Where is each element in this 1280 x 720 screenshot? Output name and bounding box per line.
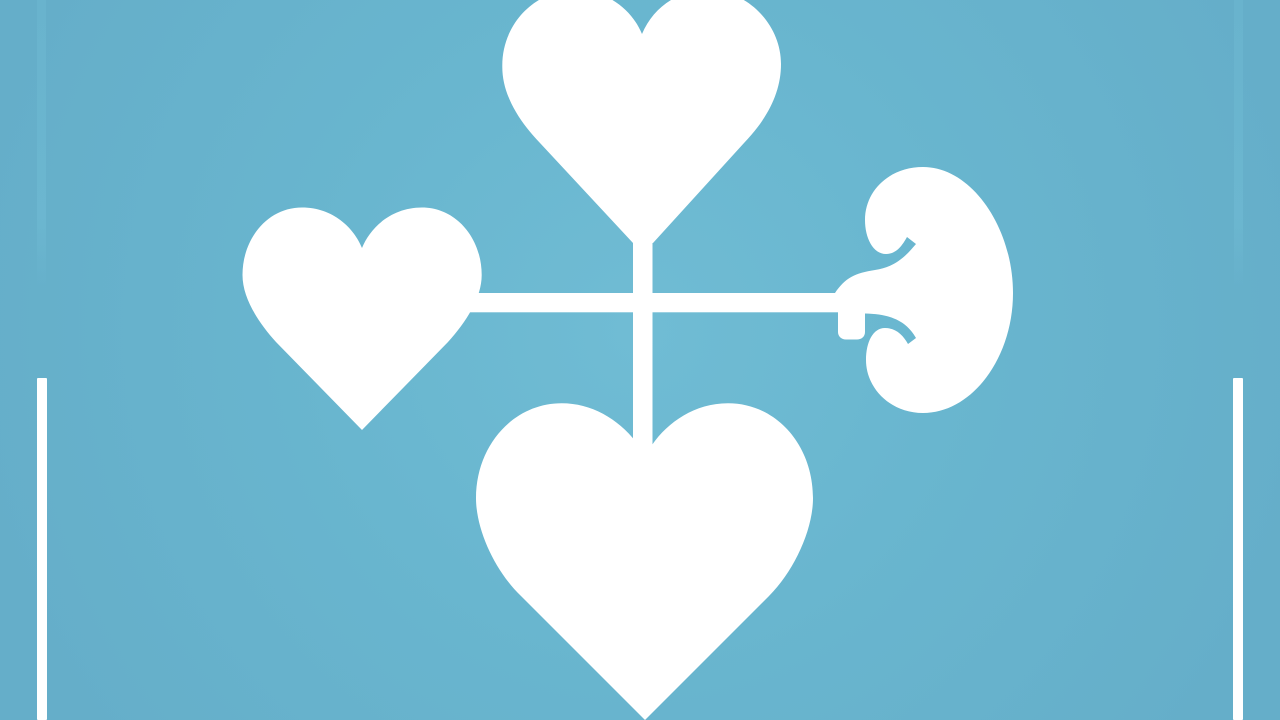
right rail	[1233, 378, 1243, 720]
faded right rail	[1234, 0, 1243, 290]
icon: bottom heart	[476, 403, 813, 720]
icon: left heart	[242, 208, 482, 430]
vertical connector	[633, 235, 652, 460]
icon: kidney	[835, 167, 1013, 413]
horizontal connector	[465, 293, 845, 312]
left rail	[37, 378, 47, 720]
icon: top heart	[502, 0, 781, 243]
faded left rail	[37, 0, 46, 290]
